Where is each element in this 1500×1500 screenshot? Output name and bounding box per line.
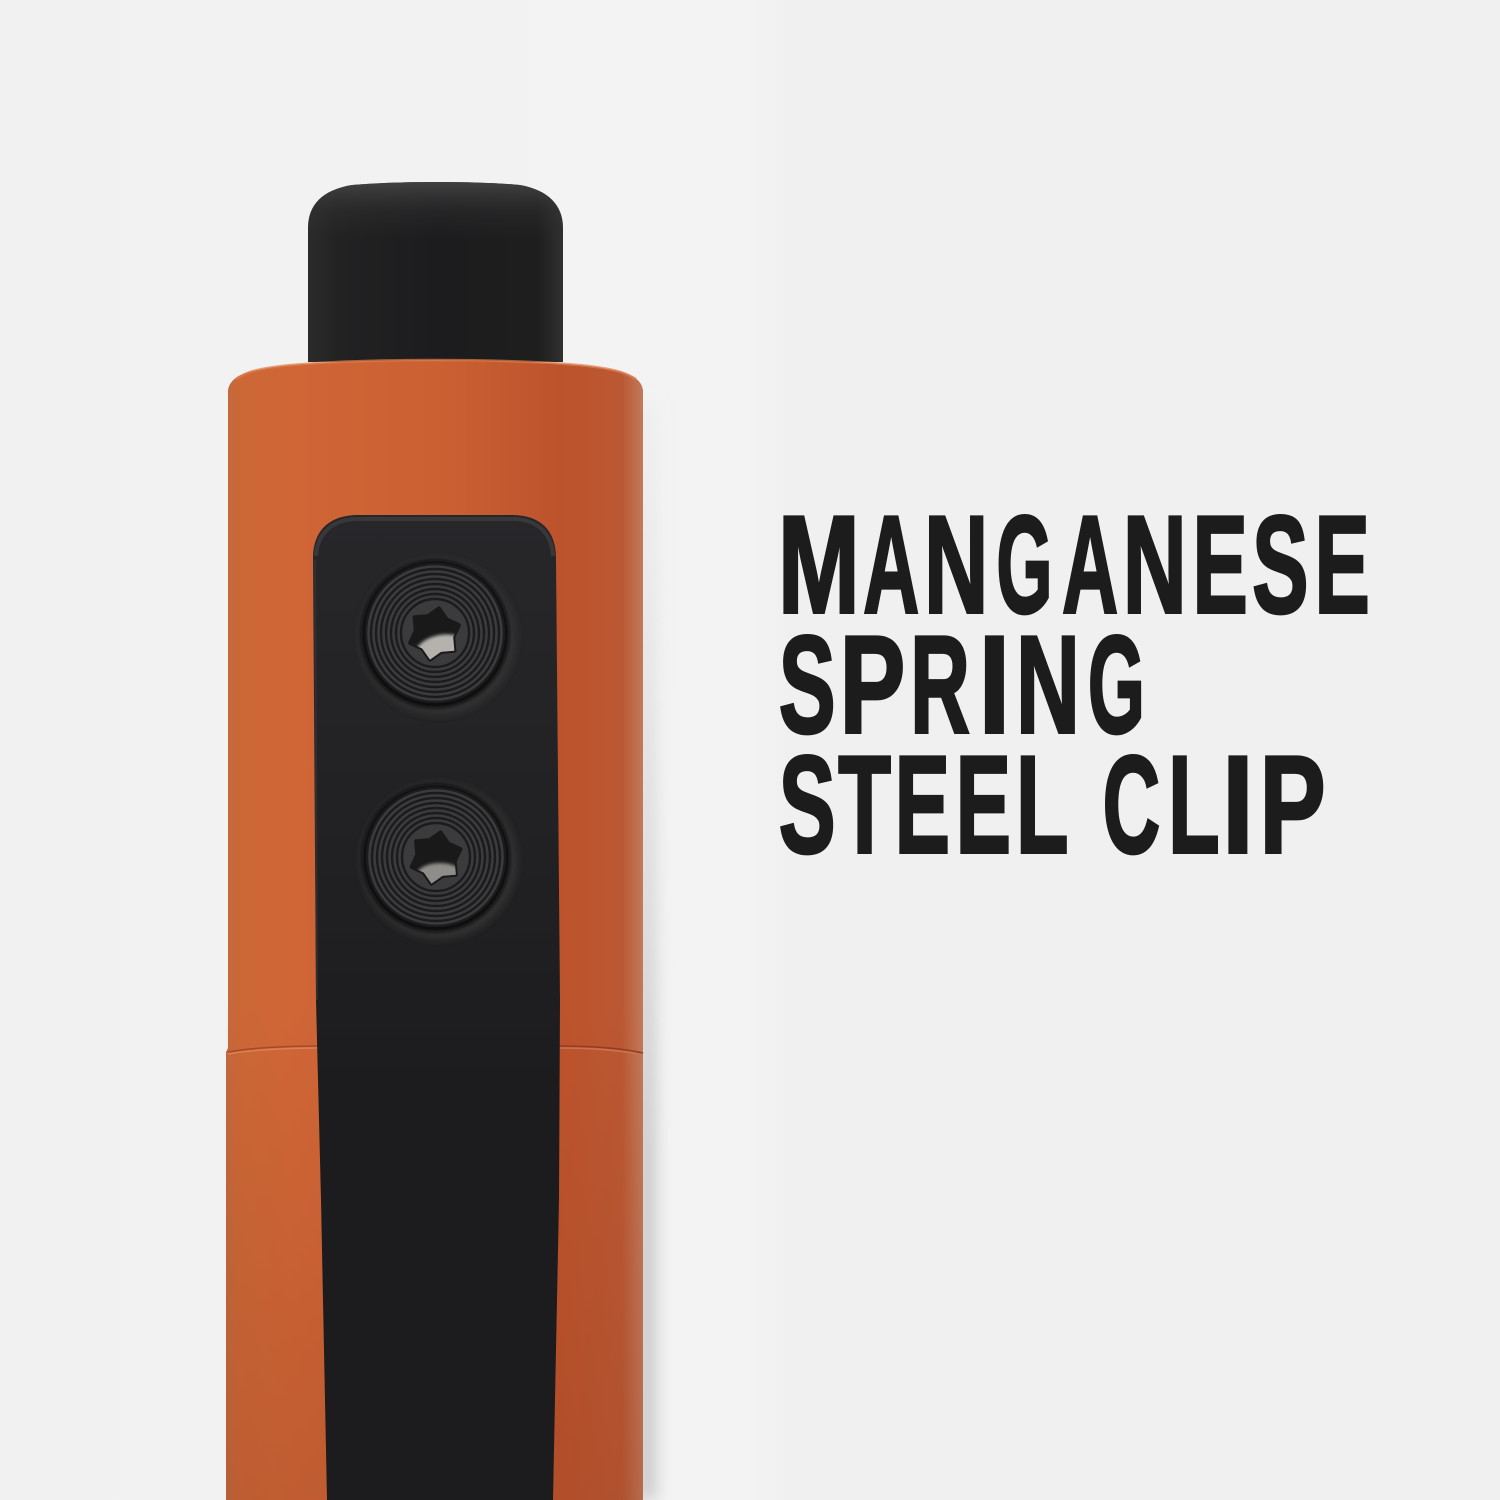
title line 3: E <box>895 728 950 882</box>
title line 1: S <box>1252 488 1308 642</box>
title line 1: A <box>1062 488 1118 642</box>
pocket clip <box>313 515 560 1500</box>
title line 1: G <box>996 488 1052 642</box>
title line 3: C <box>1103 728 1160 882</box>
screw 1 <box>360 559 516 715</box>
title line 1: E <box>1192 488 1248 642</box>
title line 1: E <box>1314 488 1370 642</box>
title line 1: N <box>924 488 988 642</box>
title line 2: I <box>978 608 1010 762</box>
push button <box>308 182 563 362</box>
orange barrel <box>226 360 643 1500</box>
title line 2: P <box>840 608 905 762</box>
title line 2: N <box>1016 608 1080 762</box>
torx recess 1 <box>408 606 461 662</box>
barrel seam <box>228 1046 643 1055</box>
title line 3: E <box>956 728 1011 882</box>
title line 3: S <box>779 728 836 882</box>
pen shadow <box>636 400 656 1500</box>
torx recess 2 <box>412 832 464 889</box>
title line 3: L <box>1016 728 1067 882</box>
title <box>778 488 1370 882</box>
title line 3: I <box>1222 728 1254 882</box>
screw 2 <box>361 783 517 939</box>
pen <box>226 182 656 1500</box>
title line 1: N <box>1123 488 1187 642</box>
title line 2: G <box>1088 608 1145 762</box>
title line 2: R <box>910 608 970 762</box>
title line 1: A <box>863 488 919 642</box>
title line 3: T <box>838 728 891 882</box>
title line 3: P <box>1260 728 1326 882</box>
title line 1: M <box>778 488 860 642</box>
title line 3: L <box>1168 728 1220 882</box>
title line 2: S <box>779 608 836 762</box>
